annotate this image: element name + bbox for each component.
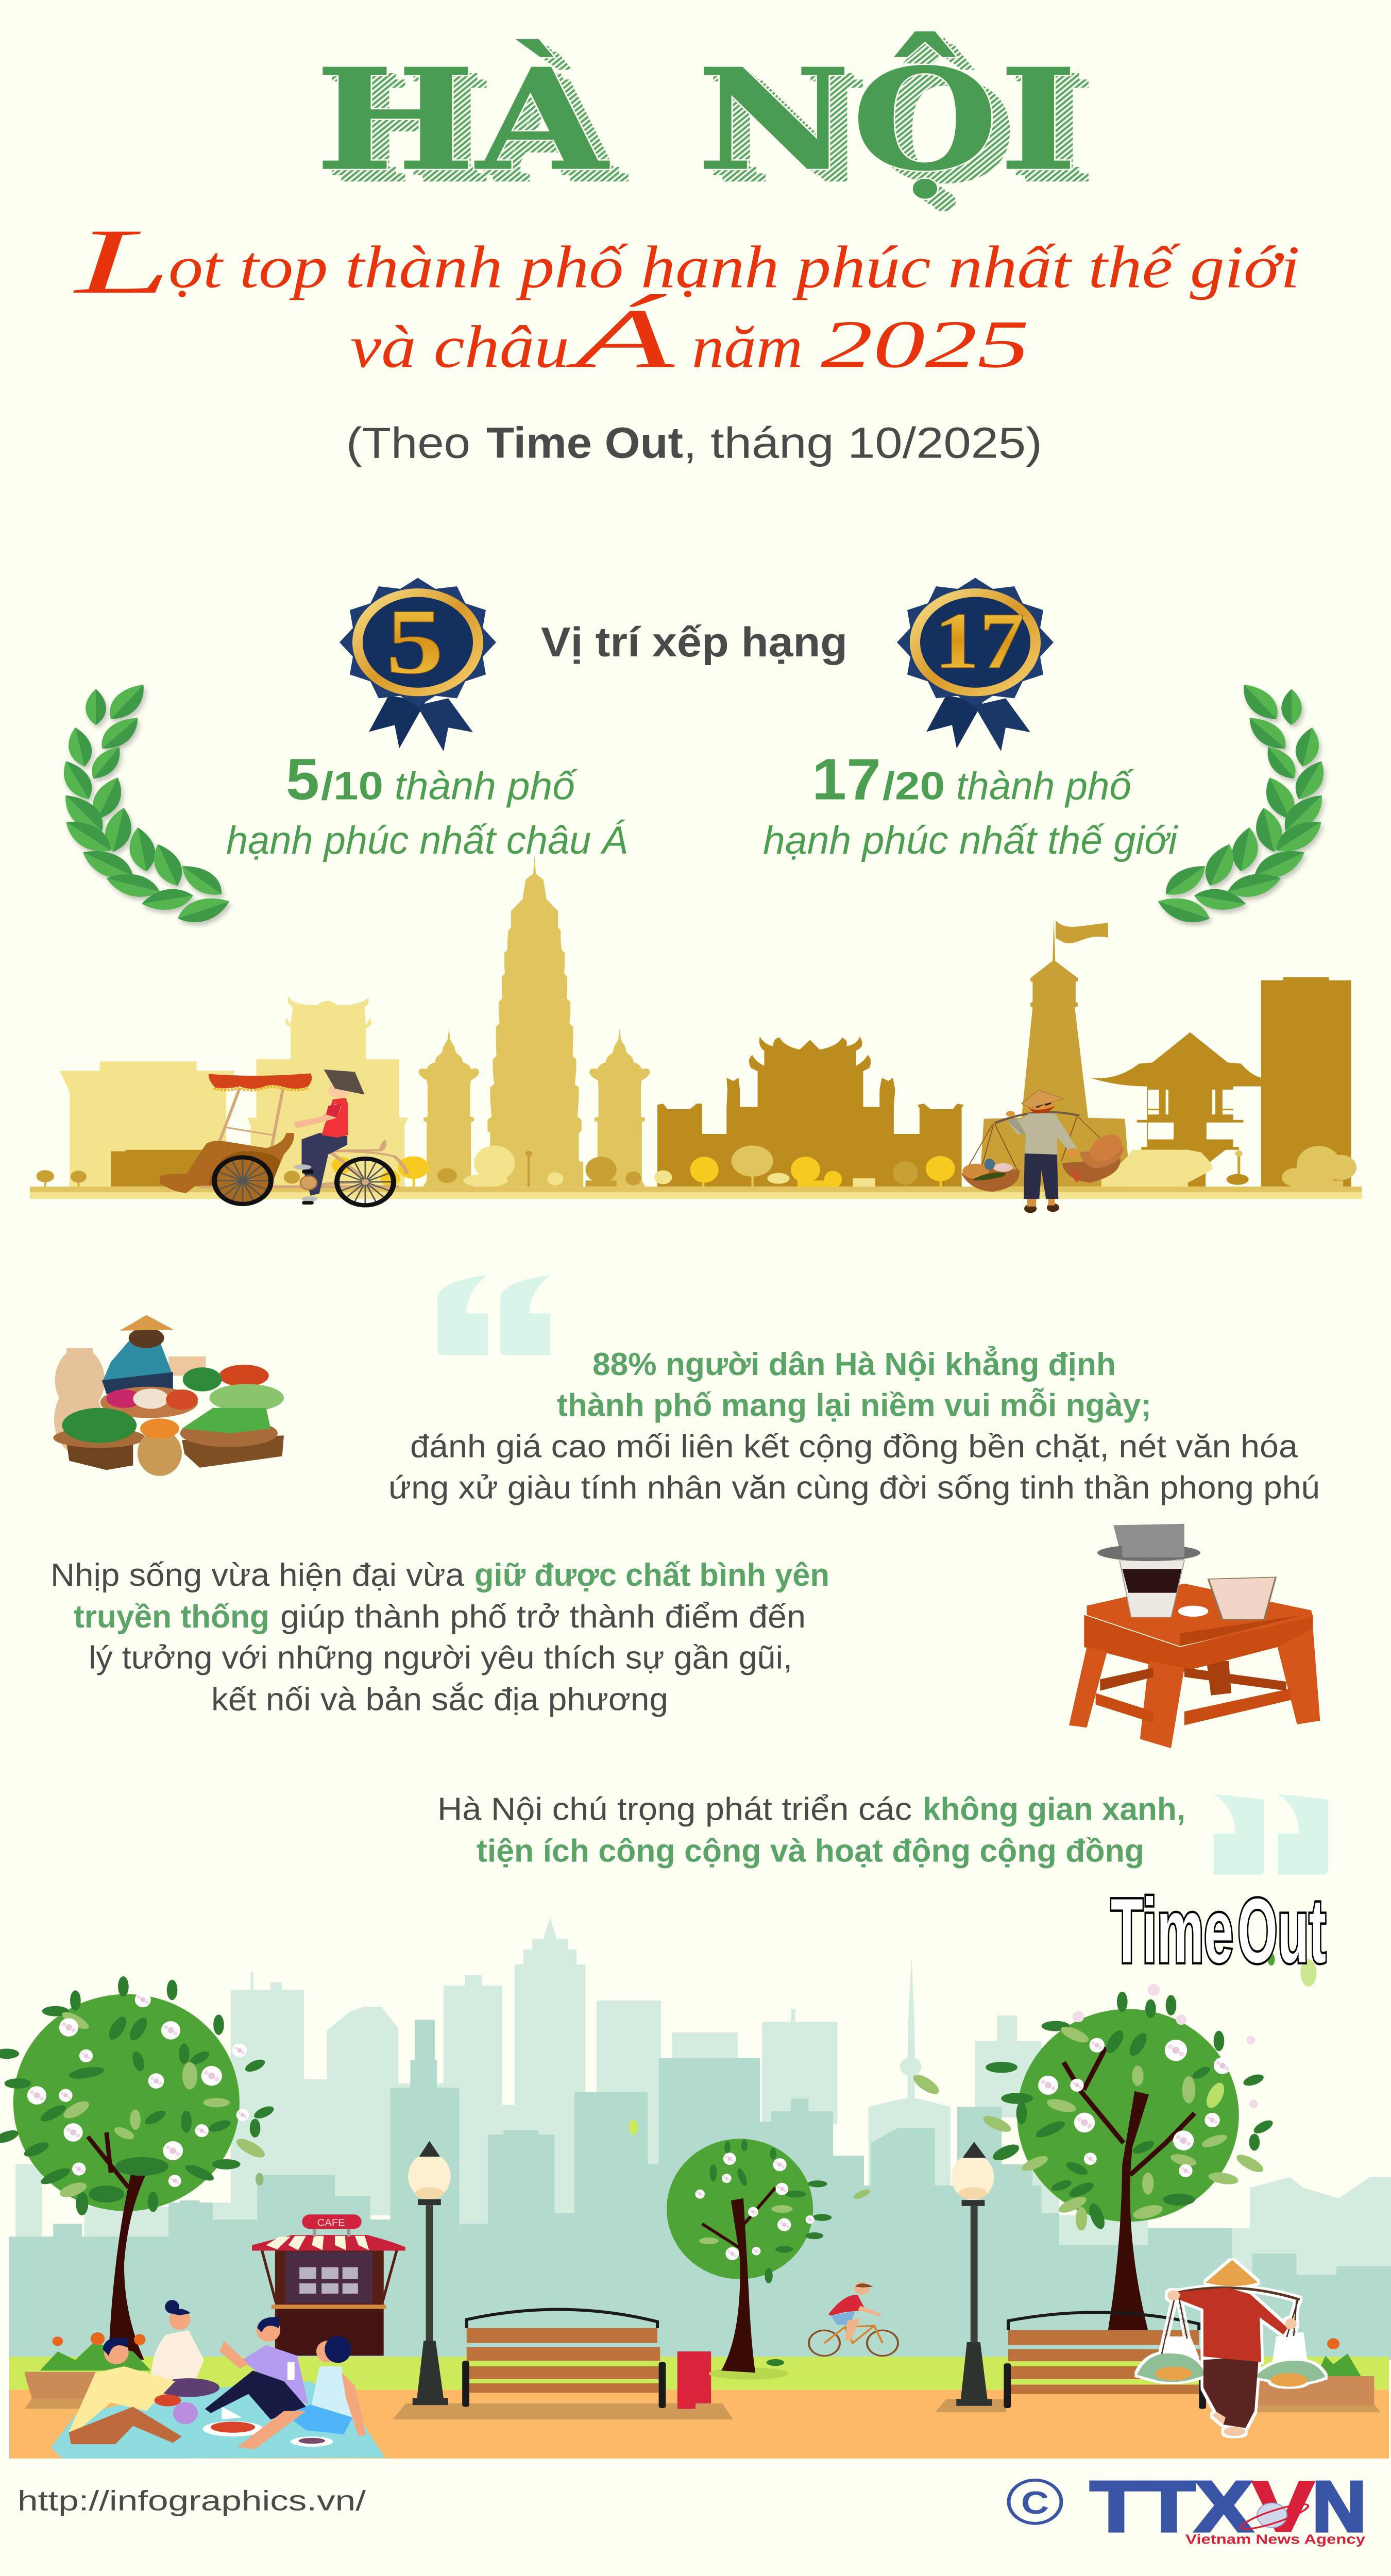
badge: rank 17: 17 — [934, 596, 1025, 685]
subtitle script heading: và châu — [350, 314, 569, 380]
bench right — [1004, 2312, 1381, 2412]
laurel right — [1153, 679, 1332, 928]
cafe kiosk: CAFE — [317, 2217, 345, 2228]
picnic group — [51, 2300, 696, 2459]
road strip — [30, 1187, 1362, 1199]
quote mark open — [437, 1275, 550, 1355]
text block: 88 percent: 88% người dân Hà Nội khẳng định — [592, 1345, 1116, 1382]
text block: pace of life — [50, 1556, 829, 1717]
lamp post right — [935, 2142, 1006, 2412]
text block: pace of life: giữ được chất bình yên — [474, 1556, 829, 1593]
text block: green spaces: tiện ích công cộng và hoạt động cộng đồng — [477, 1833, 1144, 1869]
source line — [346, 418, 1042, 467]
title: Hà Nội: HÀ — [333, 50, 630, 215]
small tree centre — [667, 2071, 942, 2419]
subtitle script heading: L — [73, 209, 171, 313]
cafe kiosk — [252, 2214, 405, 2355]
text block: green spaces: Hà Nội chú trọng phát triển các — [437, 1791, 912, 1827]
text block: green spaces — [437, 1791, 1185, 1869]
laurel left — [55, 679, 234, 928]
text block: pace of life: giúp thành phố trở thành điểm đến — [280, 1598, 806, 1634]
text block: pace of life: truyền thống — [74, 1598, 269, 1634]
footer url: http://infographics.vn/ — [18, 2485, 366, 2516]
title: Hà Nội — [315, 31, 1096, 215]
illustration: golden skyline left half — [37, 855, 696, 1187]
stat: 17/20 world: 17 — [812, 747, 881, 812]
source line: Time Out — [486, 418, 683, 467]
stat: 17/20 world — [763, 747, 1178, 862]
stat: 17/20 world: thành phố — [956, 764, 1134, 808]
stat: 5/10 Asia: 5 — [286, 747, 319, 812]
title: Hà Nội: NỘI — [706, 38, 1087, 209]
copyright symbol — [1009, 2480, 1061, 2523]
stat: 5/10 Asia: /10 — [321, 764, 383, 808]
text block: pace of life: Nhịp sống vừa hiện đại vừa — [50, 1556, 464, 1593]
stat: 5/10 Asia — [226, 747, 628, 862]
badge: rank 17 — [897, 578, 1054, 751]
illustration: market vendor — [53, 1315, 284, 1476]
TTXVN logo: V — [1252, 2467, 1314, 2546]
flower planter left — [24, 2332, 151, 2409]
title: Hà Nội: NỘI — [697, 31, 1078, 202]
text block: 88 percent: thành phố mang lại niềm vui mỗi ngày; — [557, 1387, 1151, 1423]
subtitle script heading: năm — [692, 314, 803, 380]
text block: green spaces: không gian xanh, — [923, 1791, 1185, 1827]
TTXVN logo — [1090, 2467, 1366, 2547]
stat: 5/10 Asia: thành phố — [395, 764, 578, 808]
title: Hà Nội: HÀ — [315, 38, 612, 202]
text block: pace of life: kết nối và bản sắc địa phương — [211, 1681, 668, 1717]
copyright symbol: C — [1021, 2484, 1049, 2520]
park background skyline — [9, 1918, 1391, 2360]
illustration: cyclo and driver — [160, 1070, 407, 1205]
title: Hà Nội: HÀ — [324, 44, 621, 209]
text block: 88 percent — [388, 1345, 1320, 1505]
badge: rank 5: 5 — [386, 589, 444, 693]
tree right with blossoms — [981, 1953, 1316, 2330]
subtitle script heading: Á — [565, 292, 675, 385]
title: Hà Nội: NỘI — [715, 44, 1096, 215]
source line: , tháng 10/2025) — [683, 418, 1042, 467]
subtitle script heading: ọt top thành phố hạnh phúc nhất thế giới — [168, 234, 1300, 301]
stat: 17/20 world: hạnh phúc nhất thế giới — [763, 818, 1178, 862]
stat: 5/10 Asia: hạnh phúc nhất châu Á — [226, 818, 628, 862]
bench left — [462, 2310, 666, 2408]
stat: 17/20 world: /20 — [883, 764, 945, 808]
TTXVN logo: TTX — [1090, 2467, 1252, 2546]
heading: ranking positions: Vị trí xếp hạng — [541, 619, 847, 666]
subtitle script heading: 2025 — [821, 307, 1029, 382]
cyclist — [809, 2282, 898, 2356]
lamp post left — [393, 2141, 696, 2419]
source line: (Theo — [346, 418, 470, 467]
illustration: street vendor with baskets — [962, 1090, 1127, 1213]
TTXVN logo: N — [1312, 2467, 1366, 2546]
tree left with blossoms — [0, 1976, 638, 2360]
TTXVN logo: Vietnam News Agency — [1185, 2532, 1366, 2547]
Time Out logo: Time — [1111, 1879, 1233, 1981]
text block: pace of life: lý tưởng với những người yêu thích sự gần gũi, — [89, 1639, 792, 1675]
quote mark close — [1214, 1794, 1328, 1875]
illustration: coffee on plastic stool — [1069, 1524, 1320, 1748]
subtitle script heading — [73, 209, 1300, 385]
illustration: golden skyline right half — [690, 919, 1356, 1188]
park ground: lawn and path — [9, 2357, 1389, 2459]
woman with shoulder pole — [1137, 2260, 1326, 2436]
badge: rank 5 — [340, 578, 496, 751]
